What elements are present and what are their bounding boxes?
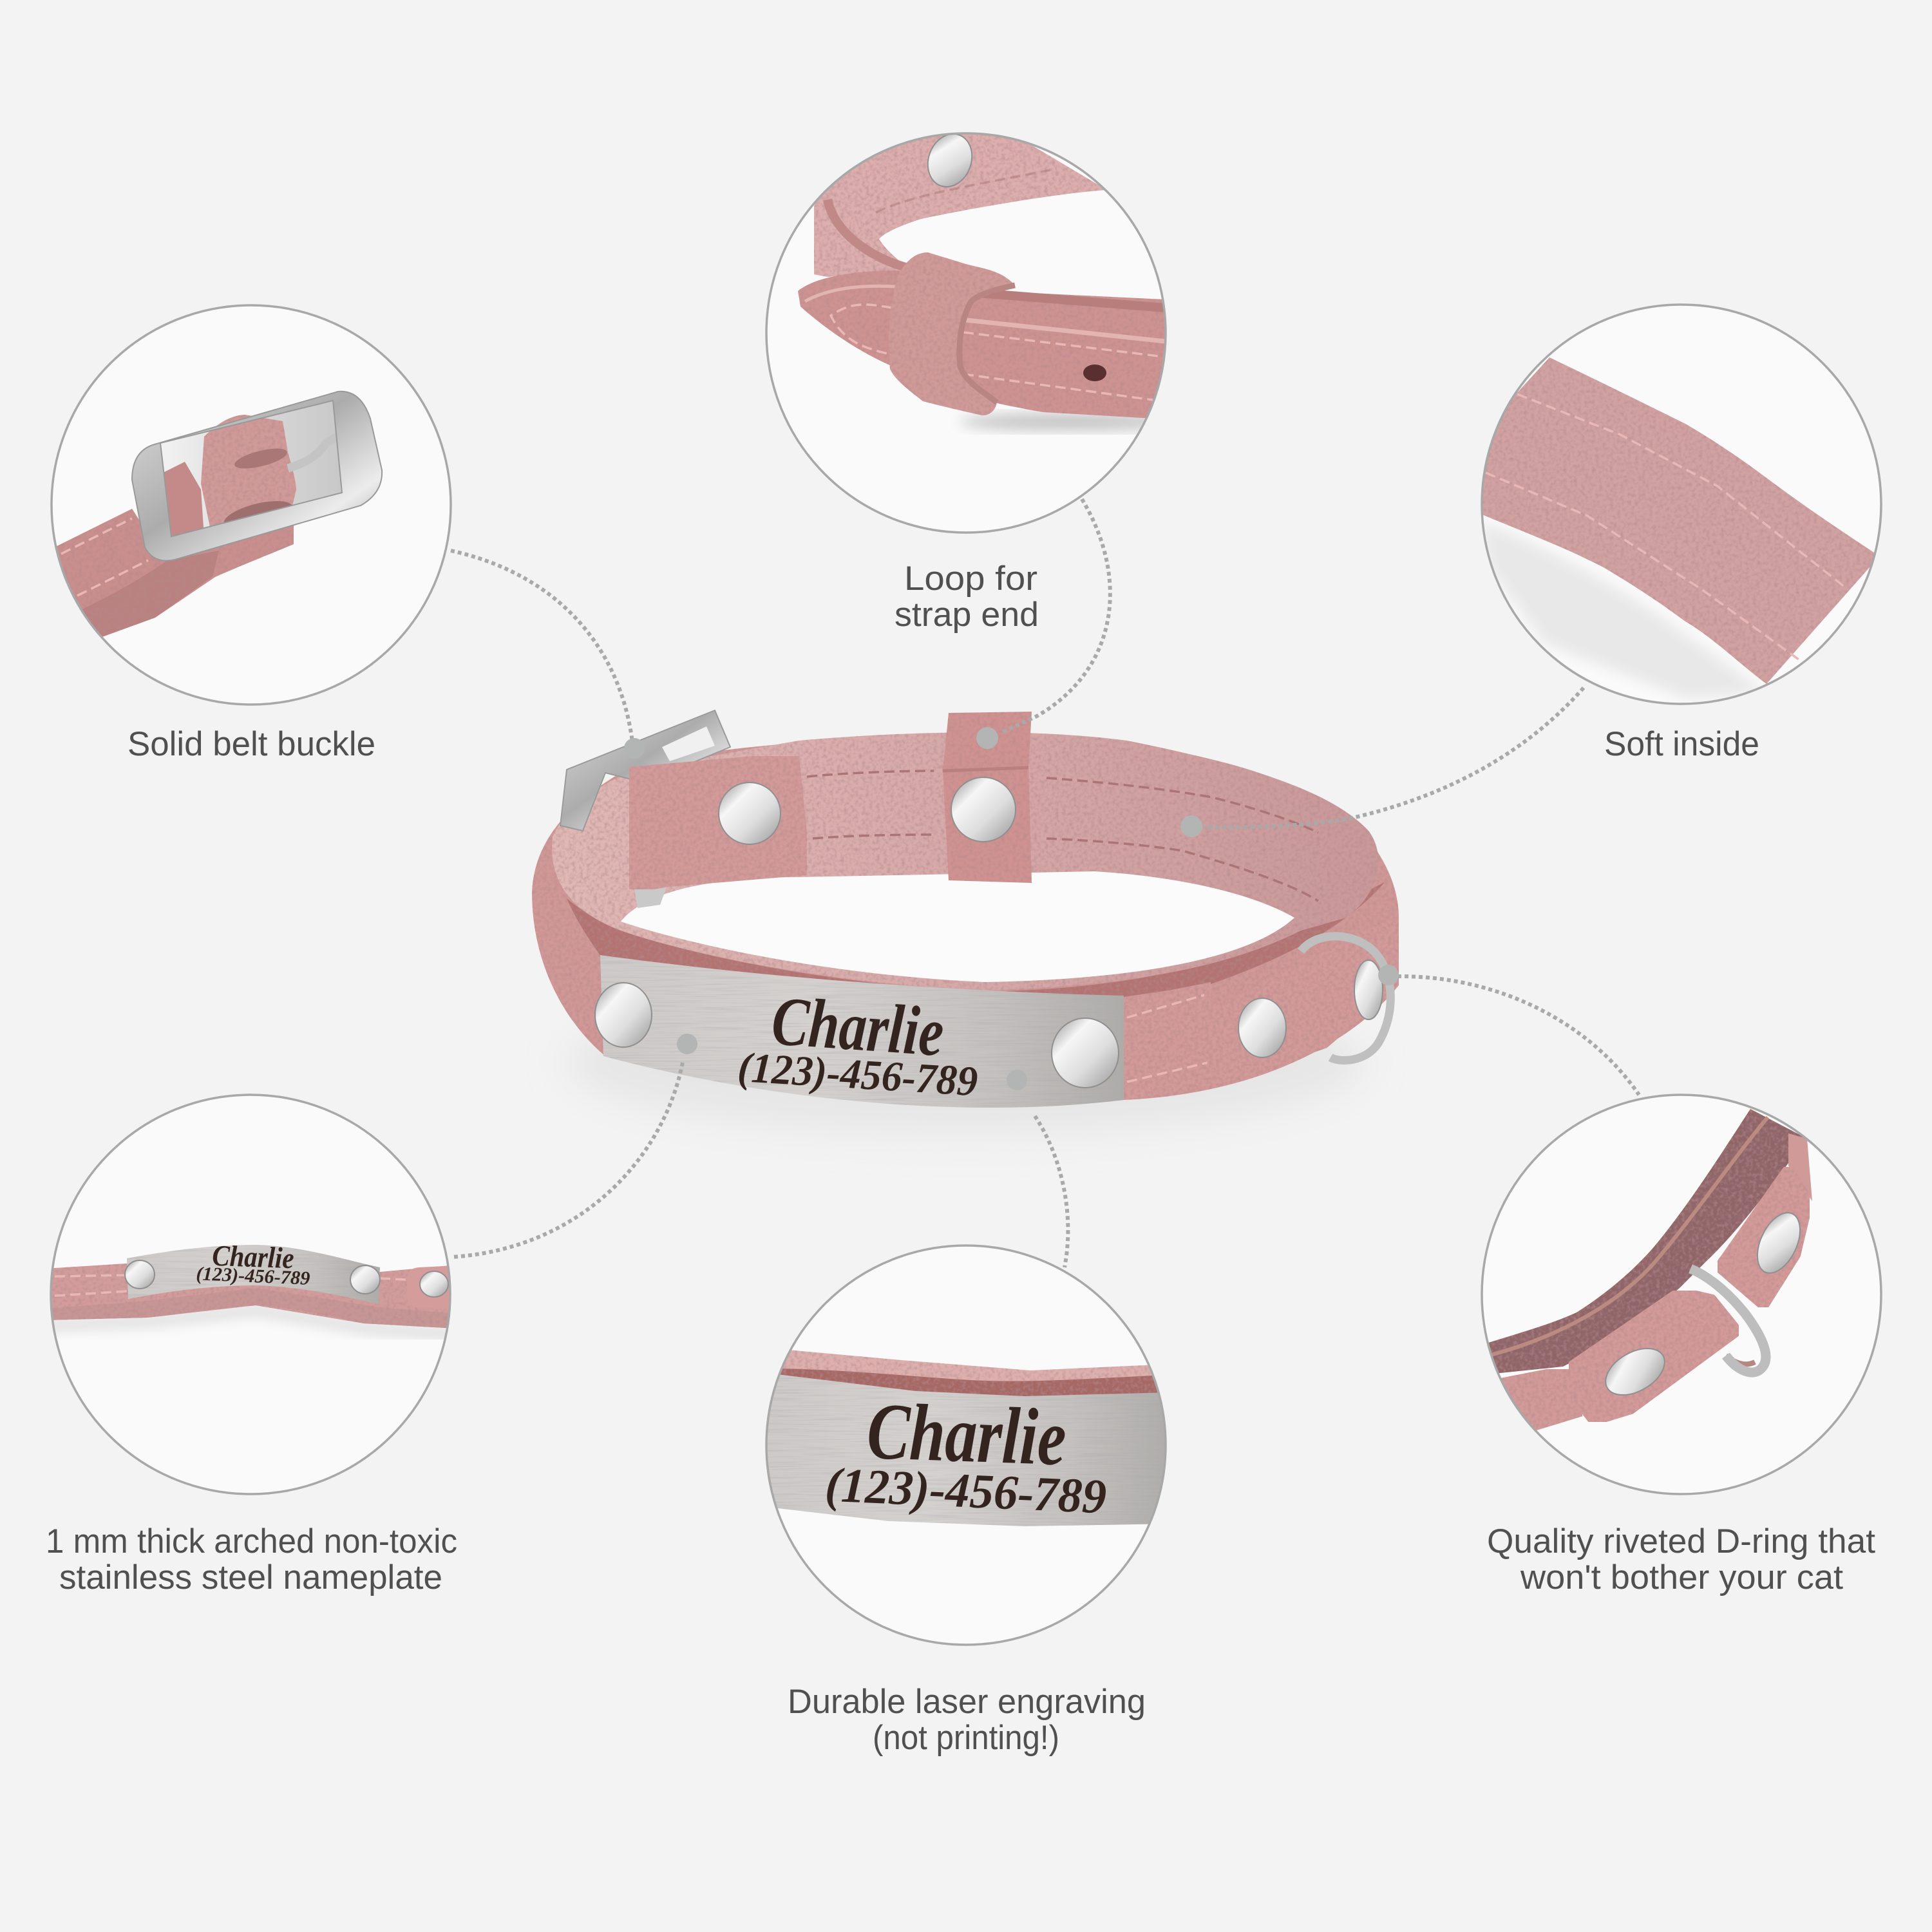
central collar bbox=[532, 710, 1399, 1133]
panel: laser engraving detail: Charlie bbox=[866, 1387, 1068, 1482]
panel: laser engraving detail: (123)-456-789 bbox=[824, 1457, 1108, 1524]
nameplate bbox=[595, 955, 1124, 1108]
label: nameplate: 1 mm thick arched non-toxic bbox=[46, 1522, 457, 1560]
connector: loop bbox=[1002, 499, 1110, 732]
connector: engraving bbox=[1035, 1116, 1068, 1267]
connector: nameplate bbox=[451, 1063, 683, 1257]
buckle bbox=[560, 710, 730, 908]
label: loop for strap end: strap end bbox=[895, 596, 1039, 634]
label: D-ring bbox=[1487, 1522, 1875, 1596]
suede inner lining bbox=[552, 732, 1378, 990]
label: nameplate bbox=[46, 1522, 457, 1596]
connector: buckle bbox=[451, 551, 633, 747]
connector: D-ring bbox=[1397, 976, 1639, 1095]
connector: soft inside bbox=[1203, 688, 1584, 827]
nameplate: Charlie bbox=[770, 983, 946, 1071]
panel: nameplate detail bbox=[45, 1095, 457, 1494]
panel: laser engraving detail bbox=[766, 1245, 1172, 1645]
strap loop with rivet bbox=[943, 712, 1032, 883]
marker dots bbox=[624, 727, 1399, 1090]
back tab with rivet bbox=[629, 756, 807, 889]
panel: D-ring detail bbox=[1468, 1095, 1881, 1494]
infographic canvas bbox=[48, 132, 1882, 1756]
panel: buckle detail bbox=[39, 305, 451, 705]
panel: loop detail bbox=[766, 128, 1179, 533]
label: loop for strap end bbox=[895, 560, 1039, 634]
label: laser engraving: (not printing!) bbox=[873, 1719, 1059, 1757]
nameplate: (123)-456-789 bbox=[736, 1044, 979, 1105]
label: laser engraving: Durable laser engraving bbox=[788, 1683, 1146, 1721]
label: nameplate: stainless steel nameplate bbox=[59, 1558, 442, 1596]
right tab with rivet and D-ring bbox=[1124, 921, 1395, 1100]
label: soft inside: Soft inside bbox=[1604, 725, 1759, 763]
label: loop for strap end: Loop for bbox=[904, 560, 1037, 598]
label: D-ring: won't bother your cat bbox=[1520, 1558, 1843, 1596]
panel: soft inside detail bbox=[1468, 305, 1884, 704]
panel: nameplate detail: (123)-456-789 bbox=[196, 1263, 310, 1289]
label: laser engraving bbox=[788, 1683, 1146, 1757]
label: solid belt buckle: Solid belt buckle bbox=[128, 725, 375, 763]
label: D-ring: Quality riveted D-ring that bbox=[1487, 1522, 1875, 1560]
panel: nameplate detail: Charlie bbox=[212, 1239, 294, 1274]
